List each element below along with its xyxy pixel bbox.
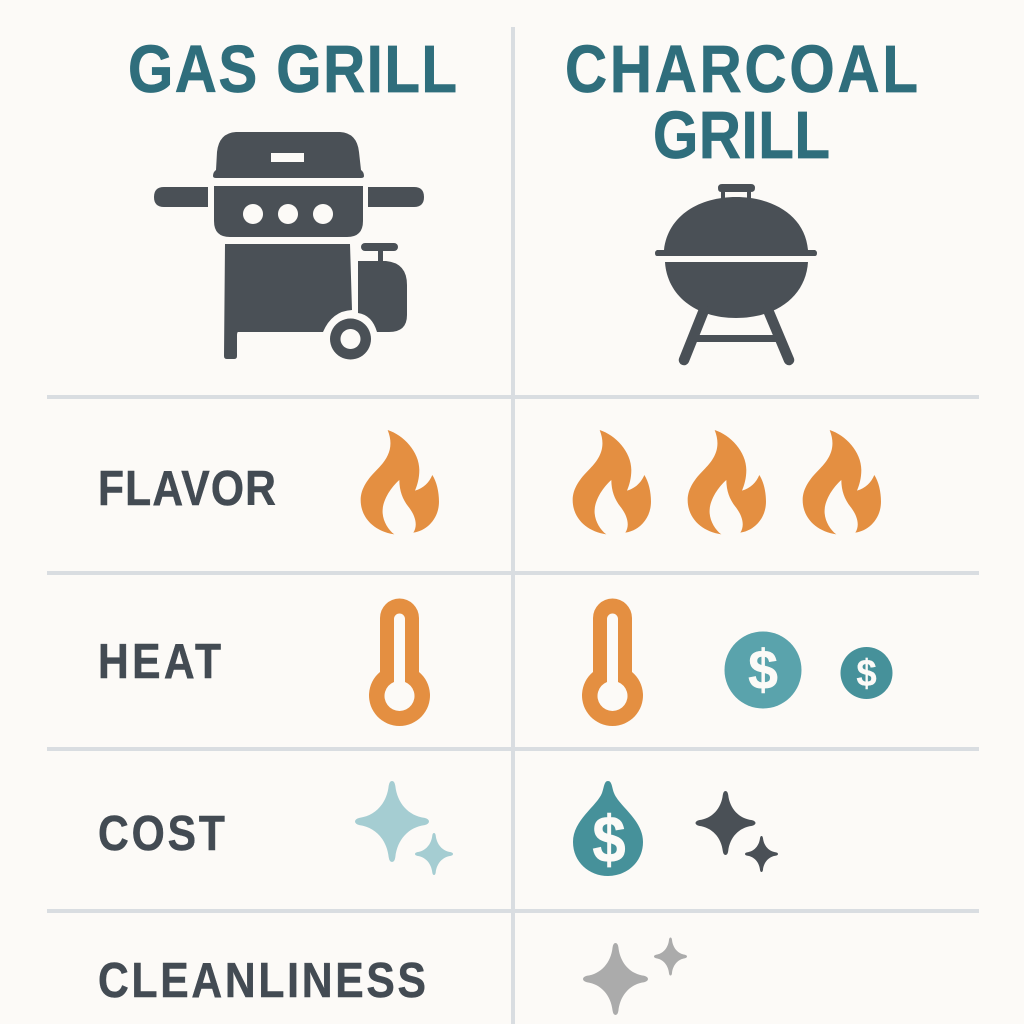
icon: flame 3 (charcoal flavor) bbox=[803, 430, 881, 534]
icon: flame 1 (charcoal flavor) bbox=[573, 430, 651, 534]
label: cleanliness: CLEANLINESS bbox=[98, 952, 426, 1008]
label: cost: COST bbox=[98, 805, 225, 861]
icon: dark sparkles (charcoal cost) bbox=[696, 791, 778, 872]
icon: gas grill bbox=[154, 132, 424, 359]
icon: small dollar coin bbox=[840, 647, 892, 699]
icon: small dollar coin: $ bbox=[856, 651, 877, 694]
icon: large dollar coin: $ bbox=[748, 639, 778, 701]
icon: thermometer (charcoal heat) bbox=[582, 599, 643, 726]
icon: large dollar coin bbox=[724, 632, 802, 708]
icon: gray sparkles (charcoal cleanliness) bbox=[583, 938, 687, 1015]
label: flavor: FLAVOR bbox=[98, 460, 276, 516]
icon: charcoal kettle grill bbox=[655, 184, 817, 360]
icon: dollar water drop bbox=[573, 781, 643, 877]
label: heat: HEAT bbox=[98, 633, 221, 689]
icon: flame 2 (charcoal flavor) bbox=[688, 430, 766, 534]
icon: dollar water drop: $ bbox=[592, 803, 626, 877]
icon: flame (gas flavor) bbox=[361, 430, 439, 534]
heading: gas grill: GAS GRILL bbox=[128, 32, 457, 107]
icon: sparkles (gas cost) bbox=[355, 781, 453, 875]
heading: charcoal grill: GRILL bbox=[653, 98, 830, 173]
heading: charcoal grill: CHARCOAL bbox=[565, 32, 918, 107]
heading: charcoal grill bbox=[565, 32, 918, 173]
icon: thermometer (gas heat) bbox=[369, 599, 430, 726]
